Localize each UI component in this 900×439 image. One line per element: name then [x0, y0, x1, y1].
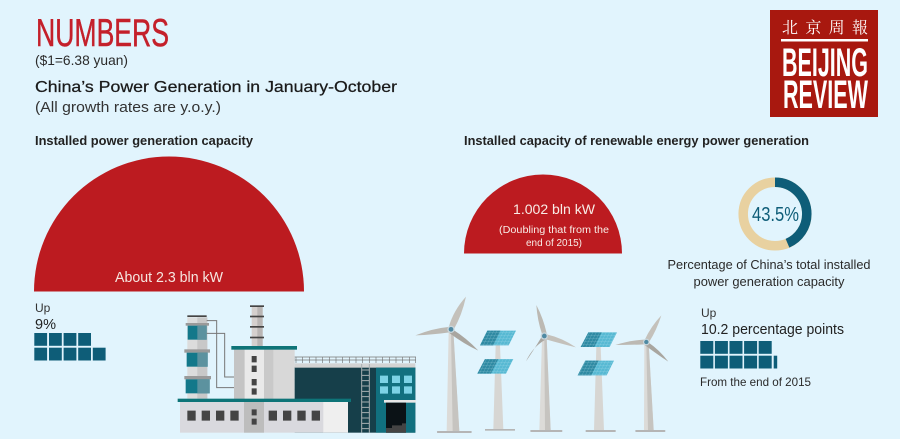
solar panel pole 2 — [578, 332, 617, 432]
logo: Beijing Review: 北京周報 — [782, 18, 868, 37]
donut chart: 43.5% — [743, 182, 807, 246]
block chart: 9 units — [34, 333, 106, 360]
semicircle: about 2.3 bln kW — [34, 157, 304, 292]
semicircle: 1.002 bln kW — [464, 175, 622, 254]
growth label: up 10.2 percentage points: Up — [701, 306, 717, 320]
heading: renewable capacity: Installed capacity of renewable energy power generation — [464, 133, 809, 148]
central building — [231, 346, 297, 399]
donut caption — [668, 257, 870, 289]
heading: China's Power Generation: China’s Power Generation in January-October — [35, 79, 398, 96]
exchange rate note: ($1=6.38 yuan) — [35, 52, 128, 68]
solar panel pole 1 — [477, 331, 516, 431]
donut caption: Percentage of China’s total installed — [668, 257, 870, 272]
panel: renewable energy capacity — [464, 133, 870, 389]
block chart: 10.2 units — [700, 341, 777, 368]
illustration: power plant — [178, 305, 416, 433]
growth rates note: (All growth rates are y.o.y.) — [35, 100, 221, 116]
growth label: up 10.2 percentage points: 10.2 percentage points — [701, 321, 844, 338]
cooling tower — [184, 315, 211, 399]
chimney — [250, 305, 264, 346]
logo: Beijing Review — [770, 10, 878, 117]
donut caption: power generation capacity — [694, 274, 845, 289]
note: from the end of 2015: From the end of 2015 — [700, 375, 811, 389]
ladder — [362, 364, 369, 433]
semicircle: 1.002 bln kW: (Doubling that from the — [499, 225, 609, 236]
low front building — [178, 399, 351, 433]
wind turbine 3 — [615, 315, 668, 432]
wind turbine 1 — [415, 297, 478, 433]
dark hall with railing — [295, 357, 416, 433]
heading: installed capacity: Installed power generation capacity — [35, 133, 254, 148]
semicircle: about 2.3 bln kW: About 2.3 bln kW — [115, 269, 224, 286]
donut chart: 43.5%: 43.5% — [752, 204, 799, 226]
growth label: up 9%: Up — [35, 301, 51, 315]
panel: installed power generation capacity — [34, 133, 304, 360]
semicircle: 1.002 bln kW: 1.002 bln kW — [513, 201, 596, 217]
pipes — [207, 321, 295, 389]
teal wing with windows and door — [376, 368, 416, 433]
title: NUMBERS: NUMBERS — [36, 12, 169, 55]
growth label: up 9% — [35, 301, 56, 333]
semicircle: 1.002 bln kW: end of 2015) — [526, 238, 582, 249]
growth label: up 9%: 9% — [35, 317, 56, 333]
growth label: up 10.2 percentage points — [701, 306, 844, 338]
illustration: wind turbines and solar panels — [415, 297, 668, 433]
wind turbine 2 — [526, 305, 576, 432]
